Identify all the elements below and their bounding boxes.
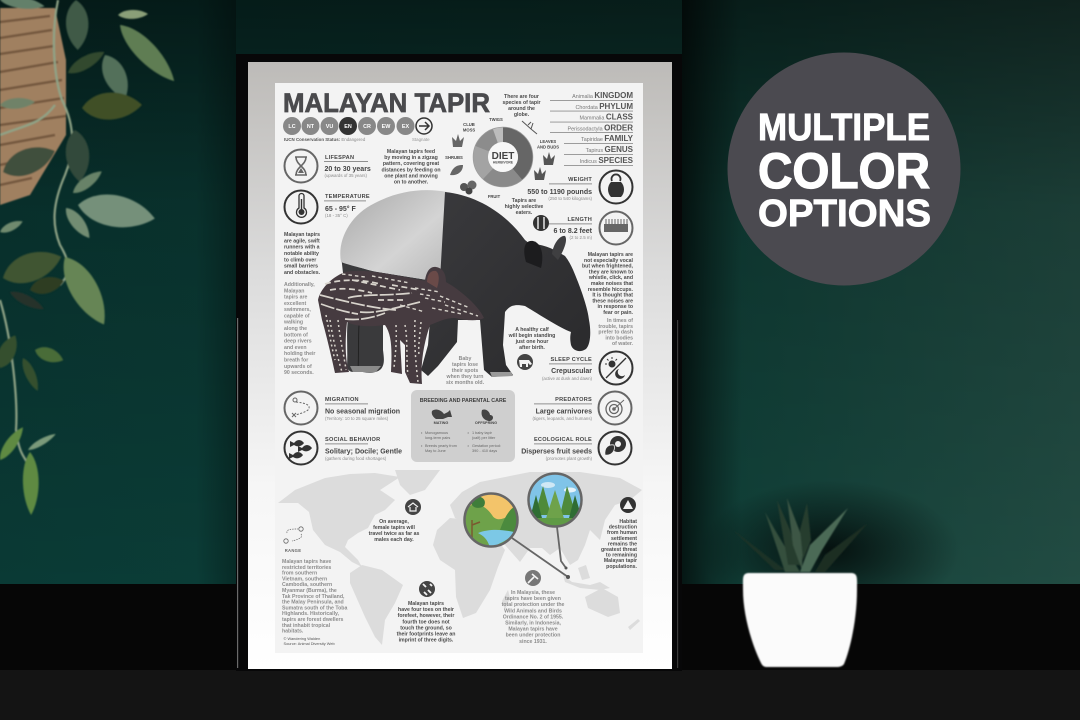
footprints note: their footprints leave an (397, 632, 455, 638)
protection note: Ordinance No. 2 of 1955. (503, 614, 564, 620)
swimming text: capable of (284, 313, 310, 319)
vocal note: they are known to (589, 269, 633, 275)
mat board (248, 62, 672, 669)
temperature (284, 190, 370, 224)
lifespan (284, 150, 371, 182)
water escape note: prefer to dash (598, 330, 633, 336)
protection note: since 1931. (519, 639, 547, 645)
diet food labels and icons: AND BUDS (537, 144, 559, 150)
range: tapirs are forest dwellers (282, 617, 344, 623)
selective eaters note: highly selective (505, 204, 543, 210)
range: restricted territories (282, 565, 331, 571)
range: Vietnam, southern (282, 576, 327, 582)
diet food labels and icons: TWIGS (489, 117, 503, 122)
taxonomy list: Mammalia CLASS (580, 113, 634, 122)
diet food labels and icons: MOSS (463, 128, 475, 132)
conservation status row: VU (326, 124, 333, 130)
white pot (743, 573, 857, 667)
weight: WEIGHT (568, 177, 592, 183)
baby tapir spots note: tapirs lose (452, 362, 478, 368)
poster sheet (275, 83, 643, 653)
water escape note: into bodies (605, 335, 633, 341)
conservation status row: EW (382, 124, 391, 130)
mating facts: • (421, 444, 423, 448)
conservation status row: IUCN Conservation Status: Endangered (284, 137, 366, 142)
icon: fork and knife (533, 215, 549, 231)
vocal note: fear or pain. (603, 310, 634, 316)
predators: Large carnivores (536, 408, 592, 416)
vocal note: It is thought that (592, 293, 633, 299)
swimming text: holding their (284, 351, 315, 357)
icon: range route (287, 529, 302, 541)
habitat threat note: destruction (609, 525, 637, 531)
credits: © Wandering Walden (284, 636, 320, 641)
weight: 550 to 1190 pounds (527, 189, 592, 196)
agility text: small barriers (284, 264, 318, 270)
footprints note (397, 581, 455, 644)
protection note (502, 570, 565, 645)
range (282, 527, 347, 635)
home range note: males each day. (374, 537, 414, 543)
habitat threat note: greatest threat (601, 547, 637, 553)
succulent plant in white pot (733, 498, 868, 667)
habitat threat note: to remaining (606, 553, 637, 559)
dark shelf (0, 584, 1080, 720)
diet food labels and icons (445, 117, 559, 199)
predators: PREDATORS (555, 397, 592, 403)
selective eaters note: Tapirs are (512, 198, 536, 204)
home range note: female tapirs will (373, 525, 415, 531)
vocal note: these noises are (592, 298, 633, 304)
habitat threat note: remains the (608, 541, 637, 547)
tapir calf (318, 267, 484, 384)
swimming text: breath for (284, 357, 308, 363)
range: Sumatra south of the Toba (282, 605, 347, 611)
offspring facts: (calf) per litter (472, 436, 496, 440)
conservation status row: CR (363, 124, 371, 130)
conservation status row: Stagnate (412, 137, 430, 142)
agility text: runners with a (284, 245, 320, 251)
vocal note: Malayan tapirs are (588, 252, 633, 258)
agility text: and obstacles. (284, 270, 321, 276)
ecological role: ECOLOGICAL ROLE (534, 437, 592, 443)
species note: globe. (514, 112, 530, 118)
sleep cycle (542, 352, 632, 384)
protection note: Malayan tapirs have (508, 627, 558, 633)
habitat threat note: from human (607, 530, 637, 536)
length (549, 212, 632, 244)
protection note: total protection under the (502, 602, 565, 608)
migration: MIGRATION (325, 397, 359, 403)
zigzag feeding text: by moving in a zigzag (384, 155, 438, 161)
offspring facts: 390 - 410 days (472, 449, 497, 453)
adult tapir (340, 190, 590, 377)
range: Cambodia, southern (282, 582, 332, 588)
panel: breeding and parental care: OFFSPRING (475, 421, 497, 425)
diet donut chart: HERBIVORE (493, 160, 514, 164)
habitat threat note: settlement (611, 536, 637, 542)
diet food labels and icons: SHRUBS (445, 155, 463, 160)
baby tapir spots note: Baby (459, 356, 471, 362)
water escape note: of water. (612, 341, 634, 347)
taxonomy list: Indicus SPECIES (580, 156, 634, 165)
length: 6 to 8.2 feet (553, 228, 593, 235)
social behavior: Solitary; Docile; Gentle (325, 448, 402, 456)
offspring facts: Gestation period: (472, 444, 501, 448)
protection note: been under protection (506, 633, 560, 639)
vocal note: but when frightened, (582, 264, 634, 270)
habitat threat note: populations. (606, 564, 638, 570)
swimming text: along the (284, 326, 307, 332)
water escape note: In times of (607, 318, 633, 324)
baby tapir spots note: when they turn (446, 374, 483, 380)
mating facts: Breeds yearly from (425, 444, 457, 448)
vocal note: whistle, click, and (588, 275, 633, 281)
title: MALAYAN TAPIR (283, 88, 490, 118)
panel: breeding and parental care (411, 390, 515, 462)
footprints note: fourth toe does not (402, 619, 450, 625)
habitat threat note: Malayan tapir (604, 558, 637, 564)
swimming text: swimmers, (284, 307, 311, 313)
social behavior: (gathers during food shortages) (325, 456, 387, 461)
home range note (369, 499, 421, 543)
lifespan: (upwards of 35 years) (324, 173, 367, 178)
range: the Malay Peninsula, and (282, 600, 344, 606)
migration (284, 392, 400, 424)
ecological role: Disperses fruit seeds (521, 448, 592, 456)
social behavior: SOCIAL BEHAVIOR (325, 437, 380, 443)
ecological role: (promotes plant growth) (546, 456, 593, 461)
calf standing note: just one hour (515, 339, 548, 345)
calf standing note: will begin standing (508, 333, 555, 339)
conservation status row: EX (402, 124, 409, 130)
taxonomy list: Tapirus GENUS (586, 145, 634, 154)
offspring facts: • (468, 444, 470, 448)
footprints note: imprint of three digits. (399, 638, 454, 644)
picture frame (236, 54, 682, 671)
badge: multiple color options: MULTIPLE (758, 107, 930, 149)
range: that inhabit tropical (282, 623, 331, 629)
range: Myanmar (Burma), the (282, 588, 337, 594)
predators: (tigers, leopards, and humans) (532, 416, 593, 421)
swimming text: Additionally, (284, 282, 315, 288)
agility text: Malayan tapirs (284, 232, 320, 238)
sleep cycle: (active at dusk and dawn) (542, 376, 593, 381)
offspring facts: 1 baby tapir (472, 431, 493, 435)
range: RANGE (285, 548, 301, 553)
protection note: tapirs have been given (505, 596, 561, 602)
conservation status row (283, 117, 432, 142)
woven basket (0, 8, 66, 205)
range: habitats. (282, 629, 304, 635)
baby tapir spots note: their spots (452, 368, 478, 374)
migration: No seasonal migration (325, 408, 400, 416)
icon: offspring (482, 409, 493, 421)
range: Highlands. Historically, (282, 611, 340, 617)
diet donut chart (473, 127, 533, 187)
taxonomy list: Perissodactyla ORDER (568, 124, 633, 132)
temperature: (18 - 35° C) (325, 213, 348, 218)
sleep cycle: Crepuscular (551, 368, 592, 375)
swimming text: excellent (284, 301, 306, 307)
hanging plant (0, 0, 182, 515)
badge: multiple color options: OPTIONS (758, 193, 931, 235)
protection note: In Malaysia, these (511, 590, 555, 596)
swimming text: Malayan (284, 288, 304, 294)
protection note: Similarly, in Indonesia, (505, 620, 561, 626)
home range note: On average, (379, 519, 409, 525)
social behavior (284, 432, 402, 464)
zigzag feeding text: on to another. (394, 180, 429, 186)
migration: (Territory: 10 to 25 square miles) (325, 416, 389, 421)
species note: around the (508, 106, 535, 112)
mating facts: Monogamous (425, 431, 448, 435)
footprints note: forefeet, however, their (398, 613, 454, 619)
calf standing note: after birth. (519, 345, 545, 351)
ecological role (521, 432, 632, 464)
footprints note: have four toes on their (398, 607, 454, 613)
taxonomy list: Chordata PHYLUM (576, 102, 633, 111)
range: Tak Province of Thailand, (282, 594, 345, 600)
credits: Source: Animal Diversity Web (284, 641, 335, 646)
agility text: to climb over (284, 257, 316, 263)
panel: breeding and parental care: BREEDING AND PARENTAL CARE (420, 398, 507, 404)
agility text: notable ability (284, 251, 319, 257)
water escape note: trouble, tapirs (598, 324, 633, 330)
swimming text: 90 seconds. (284, 370, 314, 376)
mating facts: • (421, 431, 423, 435)
jungle river scene (463, 492, 520, 548)
icon: tapir silhouette (517, 354, 533, 370)
baby tapir spots note: six months old. (446, 380, 485, 386)
conservation status row: NT (307, 124, 315, 130)
species note: There are four (504, 94, 539, 100)
diet food labels and icons: FRUIT (488, 194, 501, 199)
range: from southern (282, 571, 317, 577)
lifespan: 20 to 30 years (324, 166, 371, 173)
lifespan: LIFESPAN (325, 155, 354, 161)
calf standing note: A healthy calf (515, 327, 549, 333)
weight (527, 170, 632, 204)
vocal note: in response to (598, 304, 633, 310)
length: (2 to 2.5 m) (570, 235, 593, 240)
mating facts: long-term pairs (425, 436, 450, 440)
selective eaters note: eaters. (516, 210, 533, 216)
taxonomy list: Tapiridae FAMILY (581, 134, 634, 143)
swimming text: bottom of (284, 332, 308, 338)
habitat threat note: Habitat (619, 519, 637, 525)
badge: multiple color options: COLOR (758, 143, 930, 199)
swimming text: upwards of (284, 364, 312, 370)
succulent leaves (733, 498, 868, 572)
swimming text: tapirs are (284, 295, 307, 301)
species note: species of tapir (502, 100, 541, 106)
vocal note: make noises that (591, 281, 633, 287)
zigzag feeding text: pattern, covering great (383, 161, 439, 167)
agility text: are agile, swift (284, 238, 320, 244)
zigzag feeding text: distances by feeding on (381, 167, 441, 173)
zigzag feeding text: one plant and moving (384, 173, 438, 179)
swimming text: walking (283, 320, 303, 326)
icon: mating (432, 410, 452, 419)
taxonomy list (550, 91, 634, 166)
offspring facts: • (468, 431, 470, 435)
pine forest scene (527, 472, 583, 528)
conservation status row: EN (344, 124, 352, 130)
badge: multiple color options (728, 52, 960, 286)
range: Malayan tapirs have (282, 559, 331, 565)
home range note: travel twice as far as (369, 531, 419, 537)
conservation status row: LC (288, 124, 296, 130)
vocal note: resemble hiccups. (588, 287, 634, 293)
diet food labels and icons: LEAVES (540, 139, 556, 144)
footprints note: touch the ground, so (400, 625, 452, 631)
habitat pointer lines (512, 527, 570, 579)
diet donut chart: DIET (492, 151, 514, 162)
panel: breeding and parental care: MATING (434, 421, 448, 425)
swimming text: deep rivers (284, 339, 312, 345)
swimming text: and even (284, 345, 306, 351)
mating facts: May to June (425, 449, 446, 453)
habitat threat note (601, 497, 638, 570)
zigzag feeding text: Malayan tapirs feed (387, 149, 435, 155)
weight: (250 to 540 kilograms) (548, 196, 593, 201)
world map (278, 470, 642, 645)
temperature: 65 - 95° F (325, 205, 357, 213)
taxonomy list: Animalia KINGDOM (572, 91, 633, 100)
diet food labels and icons: CLUB (463, 122, 475, 127)
length: LENGTH (568, 217, 592, 223)
footprints note: Malayan tapirs (408, 601, 444, 607)
predators (532, 392, 632, 424)
vocal note: not especially vocal (584, 258, 634, 264)
temperature: TEMPERATURE (325, 194, 370, 200)
protection note: Wild Animals and Birds (504, 608, 562, 614)
sleep cycle: SLEEP CYCLE (550, 357, 592, 363)
